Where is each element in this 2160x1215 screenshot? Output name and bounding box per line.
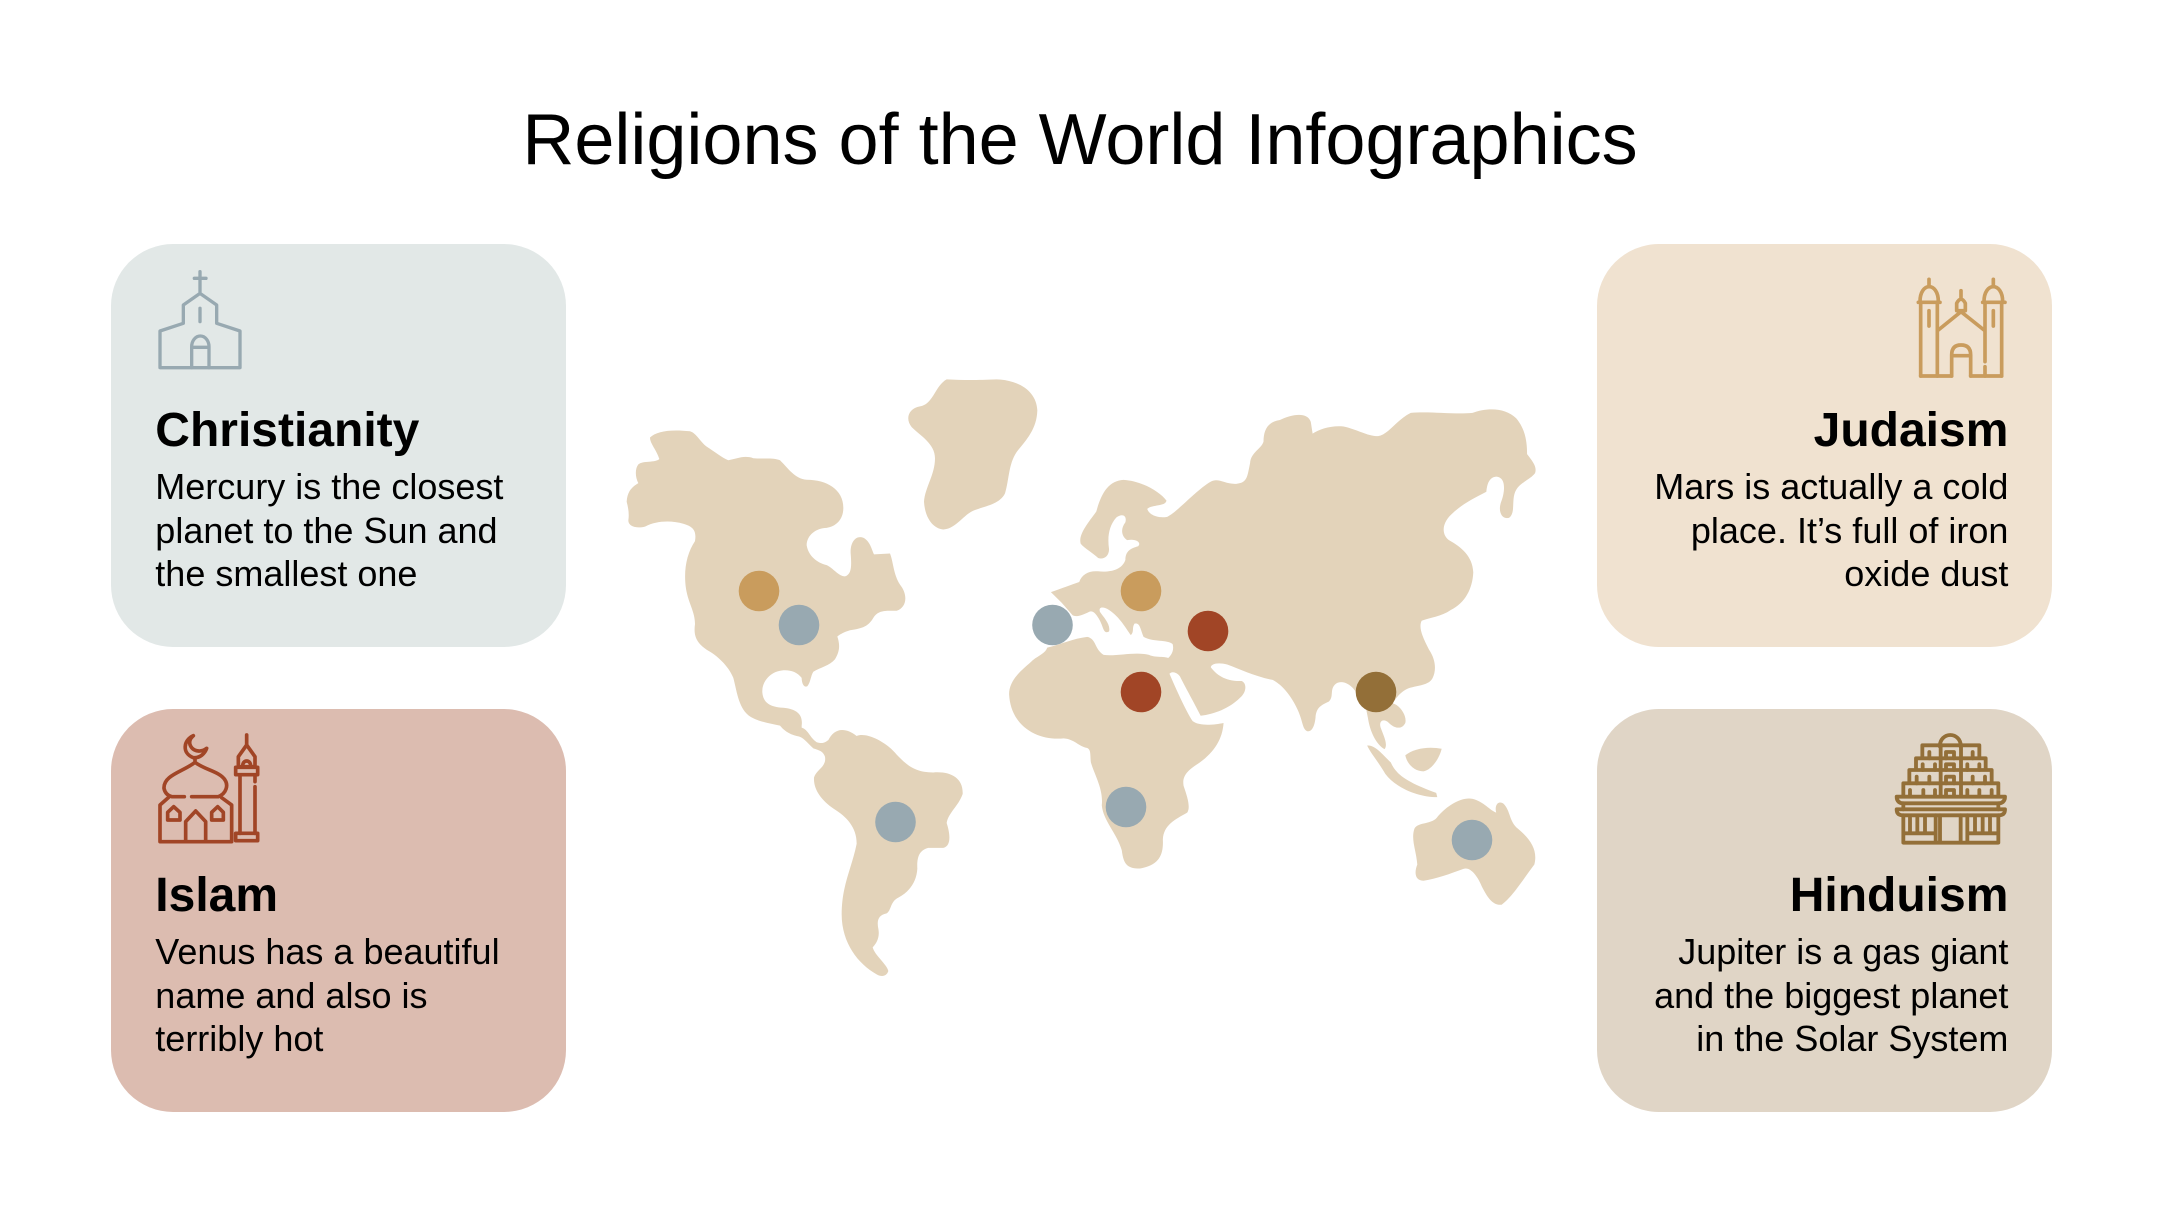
text: Hinduism description <box>1654 931 2008 1059</box>
markers: Judaism <box>739 571 1161 611</box>
text: Hinduism description: Jupiter is a gas giant <box>1678 931 2008 972</box>
text: Judaism description: oxide dust <box>1844 553 2008 594</box>
text: Christianity description: planet to the Sun and <box>155 510 498 551</box>
map: Eurasia, Africa, Australia <box>1009 409 1536 905</box>
markers: Christianity <box>779 605 1492 860</box>
marker: Hinduism <box>1356 672 1396 712</box>
icon: temple <box>1894 733 2007 845</box>
text: Judaism description: Mars is actually a cold <box>1654 466 2008 507</box>
icon: synagogue <box>1916 278 2007 378</box>
icon: church <box>158 270 242 370</box>
text: Hinduism description: and the biggest planet <box>1654 975 2008 1016</box>
text: Judaism description: place. It’s full of iron <box>1691 510 2008 551</box>
text: Islam description <box>155 931 500 1059</box>
heading: Islam: Islam <box>155 869 278 922</box>
markers: Islam <box>1121 611 1228 712</box>
heading: Hinduism: Hinduism <box>1790 869 2008 922</box>
title: Religions of the World Infographics <box>522 100 1638 180</box>
panel: Judaism <box>1597 244 2052 647</box>
panel: Hinduism <box>1597 709 2052 1112</box>
text: Christianity description: the smallest one <box>155 553 417 594</box>
text: Hinduism description: in the Solar System <box>1696 1018 2008 1059</box>
text: Islam description: Venus has a beautiful <box>155 931 500 972</box>
panel: Christianity <box>111 244 566 647</box>
text: Christianity description: Mercury is the closest <box>155 466 503 507</box>
text: Judaism description <box>1654 466 2008 594</box>
text: Islam description: name and also is <box>155 975 427 1016</box>
text: Islam description: terribly hot <box>155 1018 323 1059</box>
heading: Judaism: Judaism <box>1814 404 2008 457</box>
map: Americas and Greenland <box>627 379 1037 976</box>
text: Christianity description <box>155 466 504 594</box>
panel: Islam <box>111 709 566 1112</box>
icon: mosque <box>158 733 260 844</box>
heading: Christianity: Christianity <box>155 404 419 457</box>
